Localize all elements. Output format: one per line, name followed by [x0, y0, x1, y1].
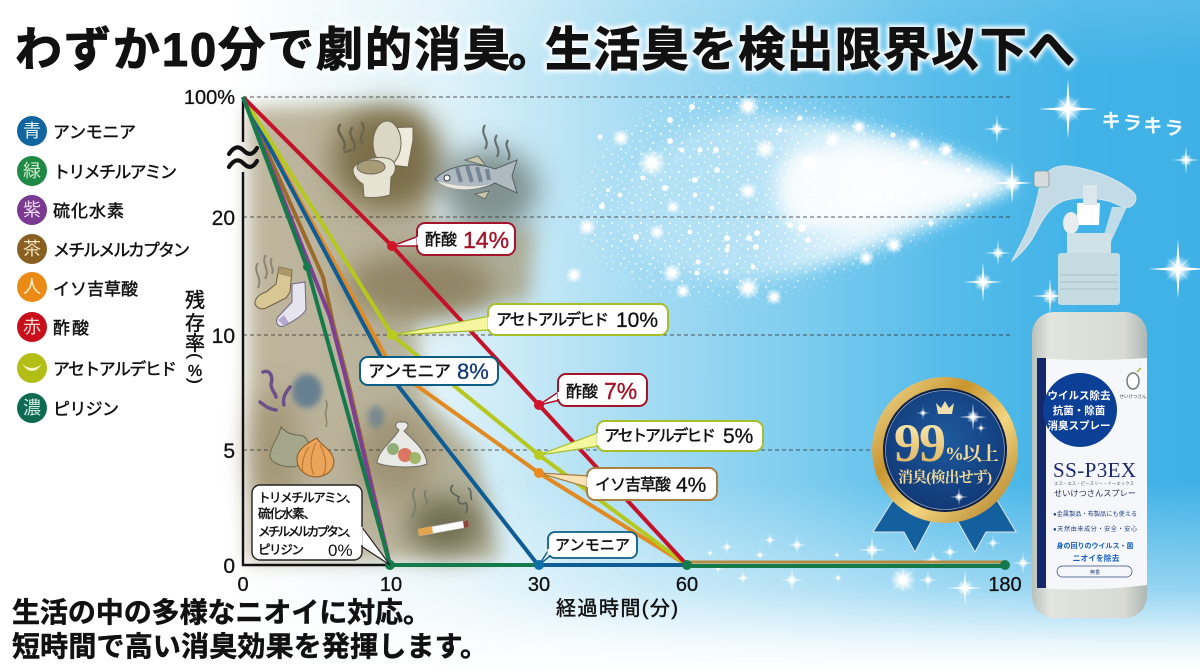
legend item: trimethylamine: 緑 — [23, 161, 41, 181]
callout: acetaldehyde 10% — [387, 304, 668, 340]
background: sky gradient — [282, 0, 1200, 660]
icon: garbage bag — [368, 406, 427, 467]
bottle label: せいけつさん — [1120, 393, 1147, 400]
callout: trimethylamine group 0% — [252, 485, 390, 565]
icon: stink and onion — [260, 371, 334, 477]
legend item: acetic acid: 酢酸 — [53, 319, 89, 338]
y axis title: ( — [186, 353, 205, 359]
legend item: isovaleric acid — [17, 272, 138, 302]
callout: ammonia 8%: 8% — [457, 359, 489, 384]
bottle label: せいけつさんスプレー — [1054, 489, 1136, 498]
x axis labels: 60 — [676, 574, 698, 596]
x axis labels: 30 — [528, 574, 550, 596]
legend item: hydrogen sulfide: 紫 — [23, 200, 41, 220]
bottle trigger head — [1012, 166, 1136, 261]
legend item: ammonia — [17, 116, 136, 146]
callout: ammonia 30 min — [534, 532, 637, 570]
title: わずか10分で劇的消臭 — [15, 23, 510, 76]
bottle label: ●金属製品・布製品にも使える — [1053, 510, 1137, 518]
bottle label: ●天然由来成分・安全・安心 — [1053, 525, 1137, 533]
product bottle — [1012, 166, 1147, 618]
callout: trimethylamine group 0%: ピリジン — [258, 543, 304, 557]
legend item: methyl mercaptan — [17, 234, 190, 264]
y axis title: 残 — [185, 289, 205, 312]
legend item: trimethylamine: トリメチルアミン — [53, 163, 177, 182]
legend item: pyridine — [17, 393, 119, 423]
medal: 消臭(検出せず) — [898, 468, 992, 486]
title: 生活臭を検出限界以下へ — [545, 23, 1075, 76]
legend item: trimethylamine — [17, 156, 177, 186]
x axis labels: 180 — [988, 574, 1022, 596]
y axis labels: 0 — [223, 555, 235, 578]
icon: toilet — [338, 121, 413, 198]
title — [15, 23, 1075, 76]
legend item: pyridine: 濃 — [23, 398, 41, 418]
callout: trimethylamine group 0%: トリメチルアミン、 — [258, 491, 358, 505]
callout: isovaleric acid 4% — [534, 468, 717, 500]
y axis title: ) — [186, 378, 205, 384]
callout: acetaldehyde 10%: アセトアルデヒド — [496, 310, 609, 329]
callout: isovaleric acid 4%: イソ吉草酸 — [595, 476, 671, 494]
y axis title: % — [188, 363, 202, 380]
callout: trimethylamine group 0%: 0% — [328, 541, 353, 560]
y axis title — [185, 289, 205, 384]
legend item: acetic acid — [17, 312, 89, 342]
bottle neck and collar — [1058, 233, 1120, 305]
legend item: acetaldehyde — [17, 353, 177, 383]
sparkle word: キラキラ — [1100, 110, 1184, 141]
callout: trimethylamine group 0%: 硫化水素、 — [258, 507, 316, 521]
x axis labels: 0 — [237, 574, 249, 596]
bottle label: 抗菌・除菌 — [1053, 404, 1105, 417]
x axis labels — [237, 574, 1022, 596]
callout: acetaldehyde 5%: アセトアルデヒド — [604, 426, 716, 445]
y axis labels: 100% — [184, 87, 235, 109]
bottle label: 無香 — [1090, 569, 1100, 576]
icon: socks — [255, 255, 306, 326]
y axis labels — [184, 87, 235, 578]
x axis labels: 10 — [380, 574, 402, 596]
legend item: ammonia: 青 — [23, 121, 41, 141]
legend item: isovaleric acid: 人 — [23, 277, 41, 297]
medal: %以上 — [945, 443, 999, 465]
bottle label: SS-P3EX — [1053, 458, 1136, 482]
bottle label: エス・エス・ピースリー・イーエックス — [1054, 481, 1134, 487]
medal — [872, 377, 1018, 552]
callout: isovaleric acid 4%: 4% — [676, 474, 706, 497]
y axis title: 存 — [185, 312, 205, 335]
gridlines — [243, 97, 1010, 450]
legend — [17, 116, 190, 423]
spray mist — [570, 85, 1020, 315]
legend item: hydrogen sulfide — [17, 195, 124, 225]
legend item: methyl mercaptan: メチルメルカプタン — [53, 241, 190, 260]
bottle body — [1032, 312, 1147, 618]
y axis labels: 10 — [212, 325, 235, 348]
callout: acetaldehyde 5%: 5% — [723, 425, 753, 448]
y axis labels: 20 — [212, 207, 235, 230]
medal: 99 — [894, 413, 946, 473]
callout: trimethylamine group 0%: メチルメルカプタン、 — [258, 525, 358, 539]
callout: acetic acid 14%: 14% — [463, 227, 509, 253]
callout: ammonia 8%: アンモニア — [368, 362, 451, 381]
legend item: isovaleric acid: イソ吉草酸 — [53, 280, 138, 299]
callout: acetic acid 7%: 7% — [604, 378, 637, 404]
legend item: acetaldehyde: アセトアルデヒド — [53, 359, 177, 379]
title: 生活臭を検出限界以下へ — [545, 23, 1075, 76]
callout: acetic acid 7%: 酢酸 — [566, 383, 598, 401]
legend item: acetic acid: 赤 — [23, 317, 41, 337]
bottle label: 身の回りのウイルス・菌 — [1056, 541, 1134, 550]
y axis labels: 5 — [223, 440, 235, 463]
icon: cigarette — [412, 485, 472, 536]
callout: acetic acid 7% — [534, 374, 647, 410]
callout: ammonia 8% — [360, 357, 498, 385]
icon: fish — [435, 125, 517, 199]
callout: acetaldehyde 5% — [534, 421, 763, 460]
bottle label: 消臭スプレー — [1048, 419, 1110, 432]
caption: 生活の中の多様なニオイに対応。 — [12, 597, 431, 628]
sparkles around spray — [564, 79, 1200, 314]
callout: acetaldehyde 10%: 10% — [616, 309, 658, 332]
y axis title: 率 — [185, 332, 205, 355]
axes — [243, 97, 392, 565]
callout: acetic acid 14% — [387, 223, 515, 255]
line chart — [243, 97, 1005, 566]
bottle label — [1037, 358, 1147, 589]
sparkles near the time axis — [705, 532, 1034, 606]
panel: odor clouds — [248, 104, 538, 562]
caption — [12, 597, 488, 662]
data markers — [303, 263, 1010, 570]
legend item: ammonia: アンモニア — [53, 123, 136, 142]
legend item: methyl mercaptan: 茶 — [23, 239, 41, 259]
caption: 短時間で高い消臭効果を発揮します。 — [12, 631, 488, 662]
title: わずか10分で劇的消臭 — [15, 23, 510, 76]
bottle label: ニオイを除去 — [1073, 553, 1120, 563]
x axis title: 経過時間(分) — [556, 597, 678, 620]
bottle label: ウイルス除去 — [1048, 389, 1111, 402]
legend item: pyridine: ピリジン — [53, 400, 119, 419]
legend item: hydrogen sulfide: 硫化水素 — [53, 202, 124, 221]
callout: acetic acid 14%: 酢酸 — [425, 231, 457, 249]
axis break mark — [229, 147, 257, 167]
callout: ammonia 30 min: アンモニア — [555, 537, 630, 554]
title: 。 — [508, 23, 555, 76]
